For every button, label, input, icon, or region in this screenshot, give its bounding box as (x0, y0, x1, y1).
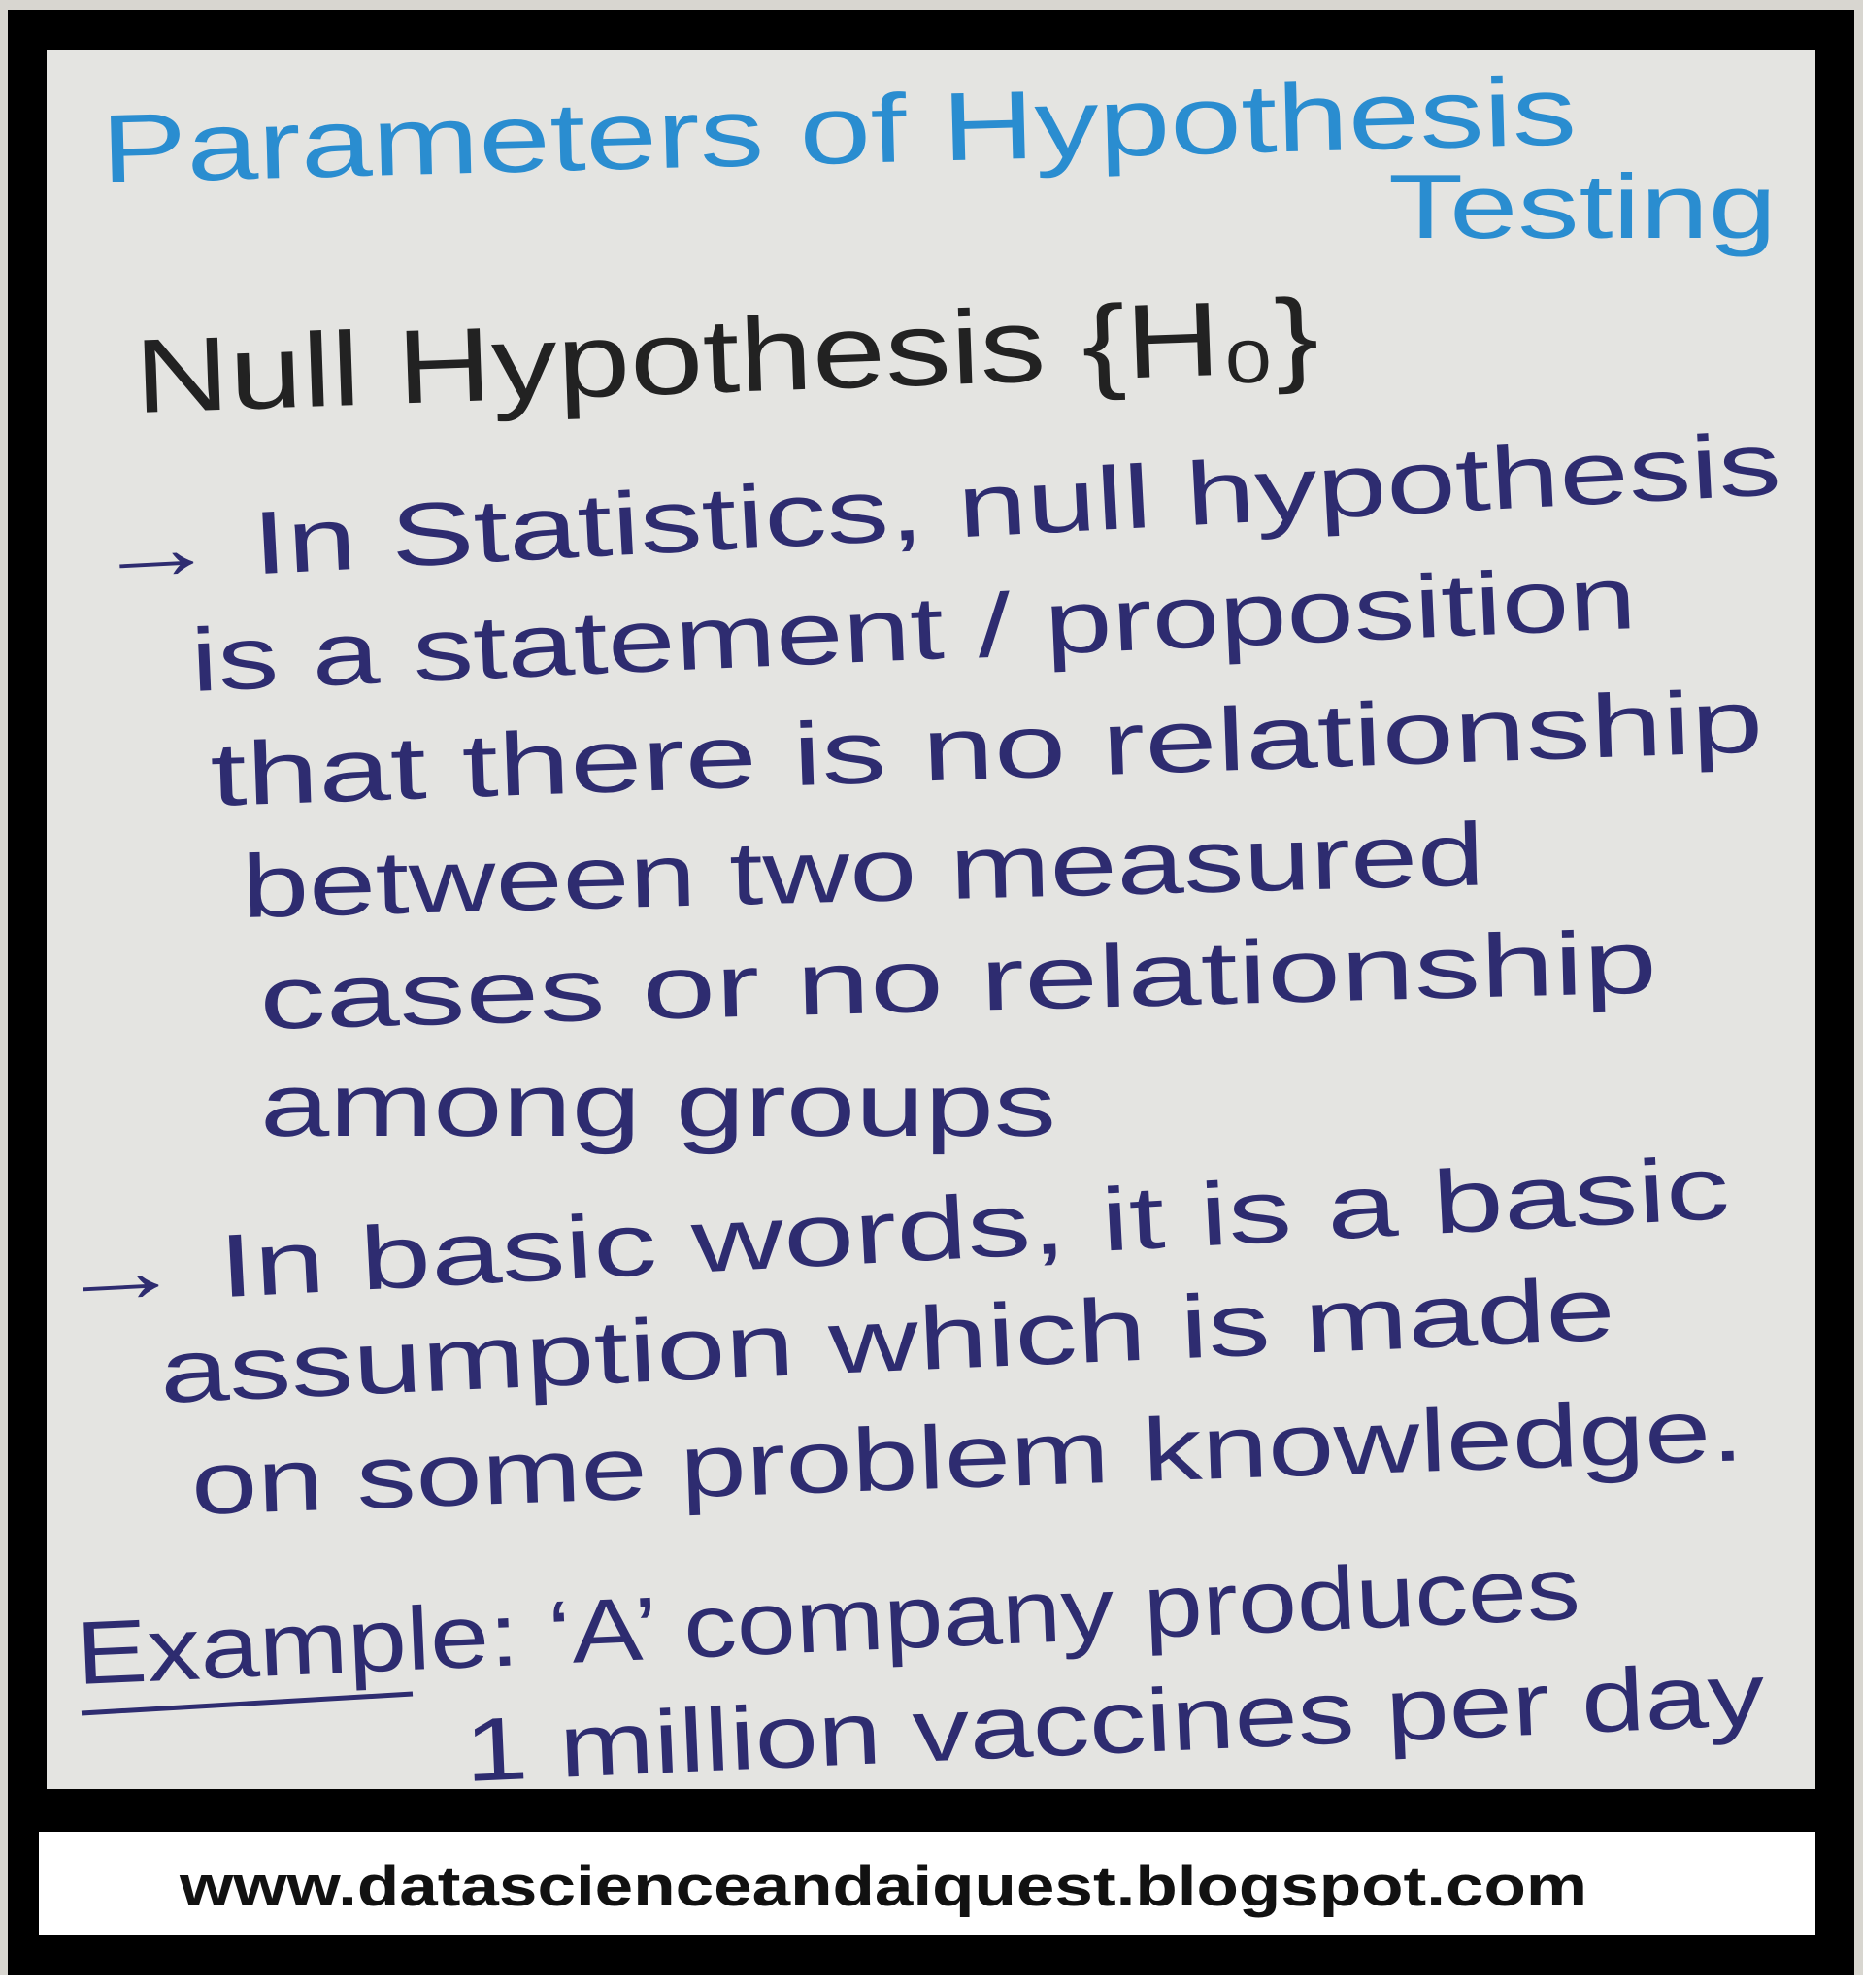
text block: definition: that there is no relationship (209, 672, 1765, 825)
title: Testing (1388, 155, 1777, 257)
text block: basic words: on some problem knowledge. (189, 1380, 1746, 1534)
text block: definition: between two measured (241, 806, 1485, 937)
text block: definition (91, 414, 1783, 1155)
example: Example: ‘A’ company produces (74, 1539, 1581, 1704)
footer url: www.datascienceandaiquest.blogspot.com (179, 1855, 1587, 1918)
title: Parameters of Hypothesis (100, 56, 1578, 204)
text block: basic words: assumption which is made (157, 1260, 1616, 1422)
text block: basic words: → In basic words, it is a basic (54, 1139, 1732, 1325)
text block: basic words (54, 1139, 1746, 1534)
heading: Null Hypothesis: Null Hypothesis {H₀} (133, 276, 1320, 435)
text block: definition: → In Statistics, null hypothesis (91, 414, 1783, 602)
title (100, 56, 1777, 257)
text block: definition: is a statement / proposition (188, 548, 1638, 711)
text block: definition: among groups (260, 1056, 1056, 1155)
example (74, 1539, 1767, 1801)
example: 1 million vaccines per day (462, 1645, 1767, 1801)
text block: definition: cases or no relationship (258, 912, 1658, 1048)
footer (39, 1832, 1815, 1935)
